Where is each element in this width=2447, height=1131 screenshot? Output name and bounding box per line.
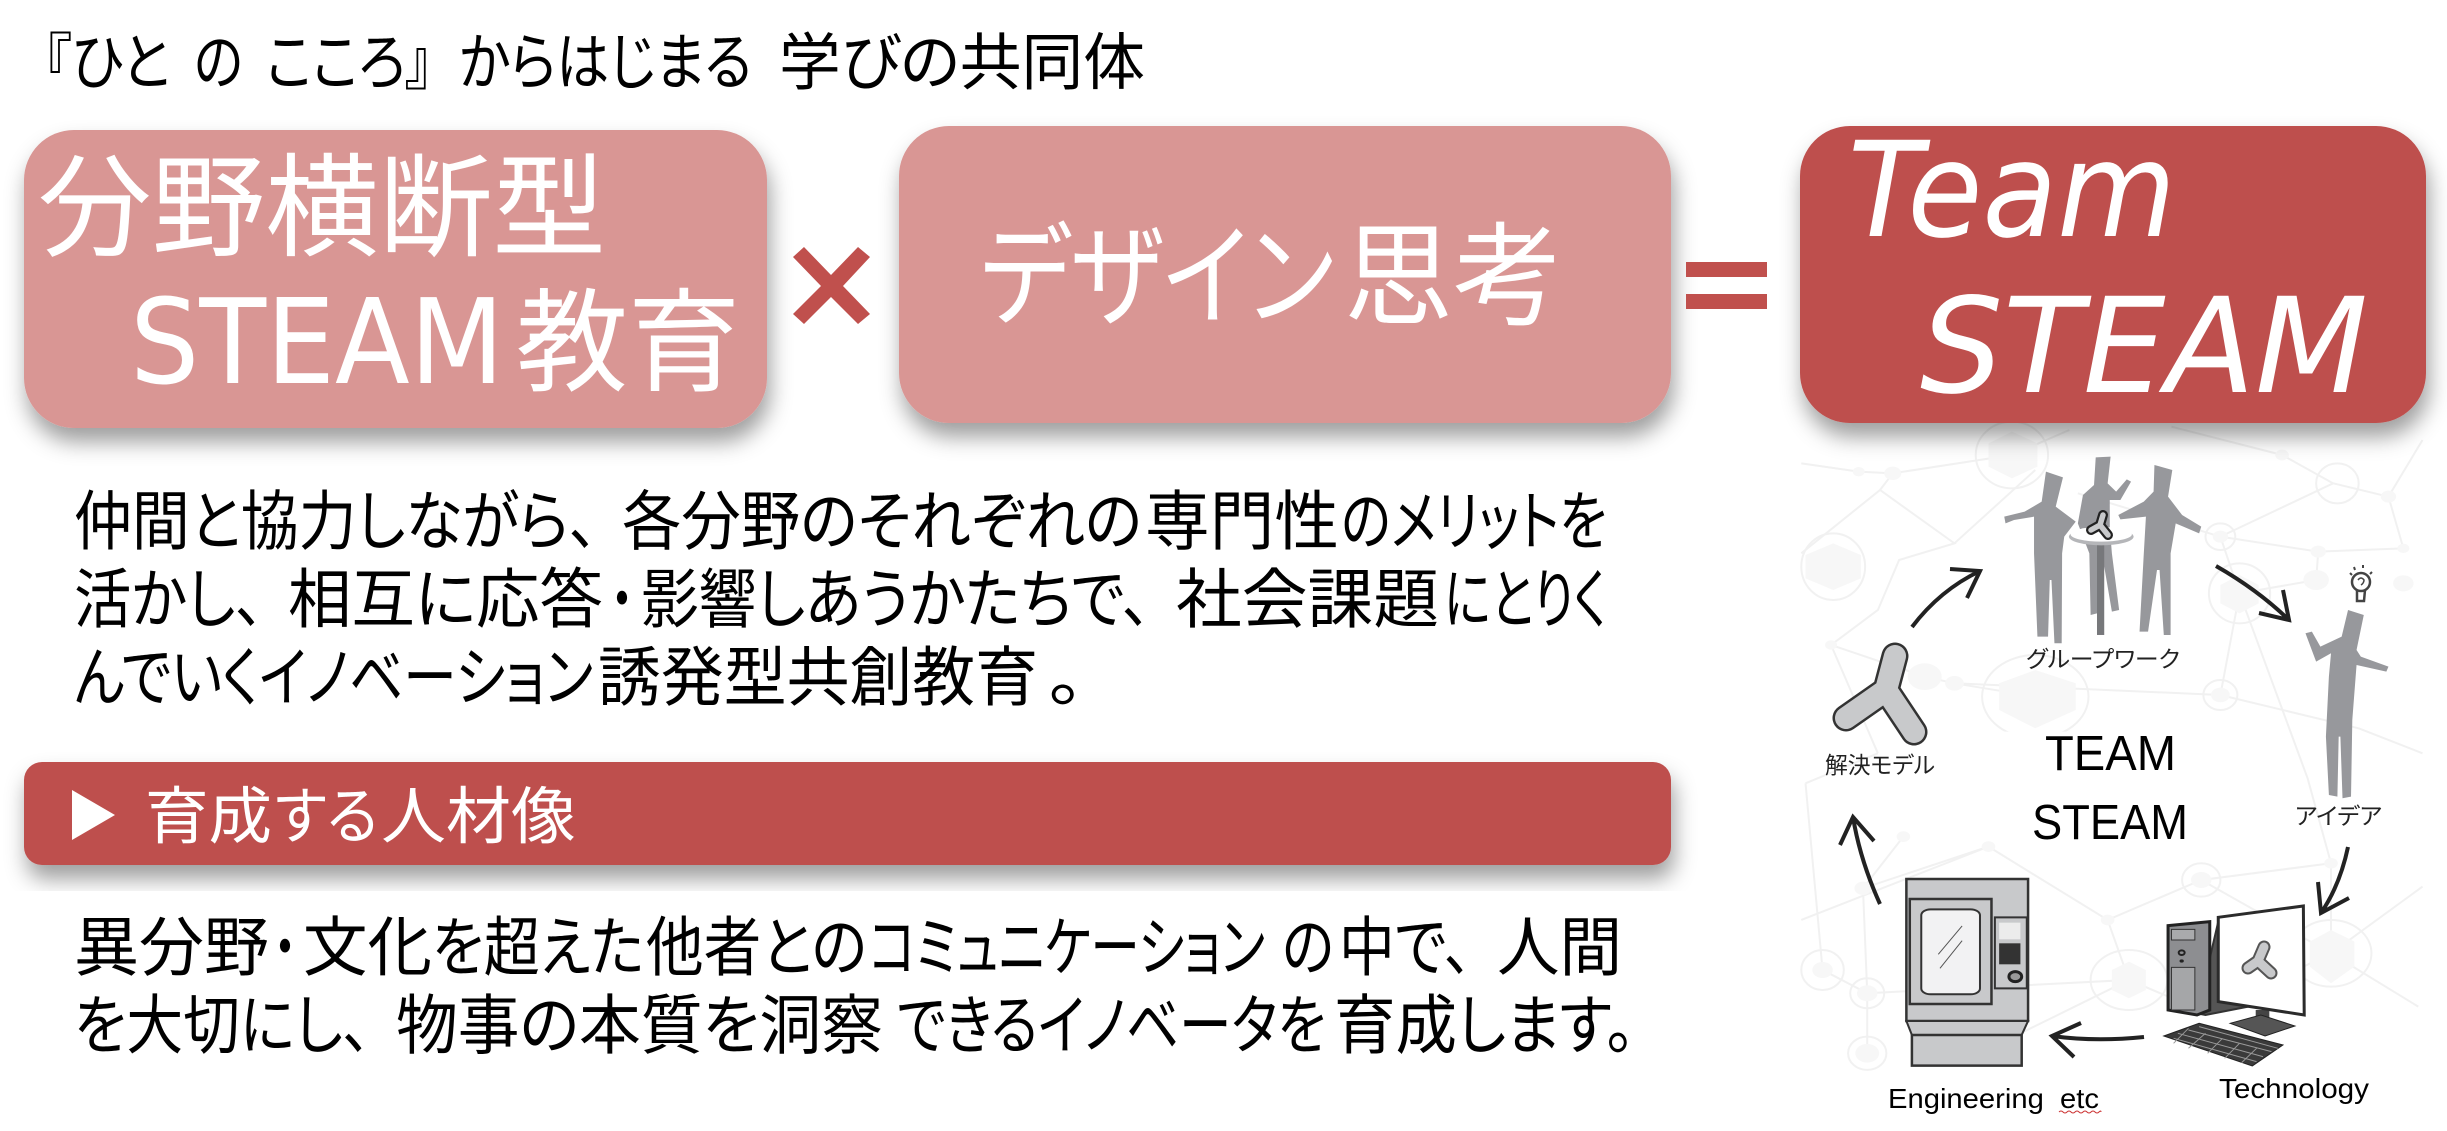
text: Team: Team bbox=[1848, 114, 2176, 268]
text block: target talent: 中で、 bbox=[1339, 911, 1472, 984]
text block: description: 専門性 bbox=[1145, 485, 1339, 558]
text block: target talent: の bbox=[1282, 911, 1334, 984]
text: 育成する人材像: 人材像 bbox=[381, 783, 576, 852]
text: STEAM: STEAM bbox=[130, 273, 504, 411]
text block: target talent: できるイノベータを bbox=[897, 989, 1326, 1062]
panel: network background bbox=[1801, 422, 2423, 1070]
text block: target talent bbox=[74, 911, 1635, 1062]
heading: TEAM STEAM bbox=[2032, 727, 2188, 850]
text: 育成する人材像: する bbox=[275, 783, 378, 852]
text block: description: 相互に応答 bbox=[288, 563, 603, 636]
text block: description: 仲間と協力しながら、 bbox=[74, 485, 598, 558]
text: デザイン思考: 思考 bbox=[1344, 215, 1562, 340]
text block: description: 社会課題 bbox=[1176, 563, 1439, 636]
text block: description: 各分野のそれぞれの bbox=[622, 485, 1142, 558]
text block: target talent: ・ bbox=[273, 911, 297, 984]
icon: small model on table bbox=[2091, 515, 2108, 535]
arrow: technology to engineering bbox=[2052, 1023, 2144, 1057]
text block: target talent: 物事の本質を洞察 bbox=[396, 989, 883, 1062]
arrow: group work to idea bbox=[2216, 566, 2289, 620]
icon: group work people bbox=[2004, 457, 2201, 643]
icon: model on monitor bbox=[2248, 947, 2271, 973]
title: からはじまる bbox=[459, 29, 752, 98]
label: アイデア: アイデア bbox=[2295, 803, 2382, 829]
title: 学びの共同体 bbox=[779, 29, 1145, 98]
text block: target talent: 他者との bbox=[646, 911, 867, 984]
icon: computer bbox=[2164, 906, 2304, 1066]
title: の bbox=[194, 29, 243, 98]
title: こころ』 bbox=[266, 29, 432, 98]
text: デザイン思考: デザイン bbox=[980, 215, 1334, 340]
icon: light bulb bbox=[2350, 565, 2372, 601]
arrow: engineering to model bbox=[1840, 817, 1880, 904]
text block: target talent: 文化 bbox=[303, 911, 432, 984]
text block: description: 。 bbox=[1048, 641, 1084, 714]
text block: description: 活かし、 bbox=[74, 563, 264, 636]
text block: target talent: 人間 bbox=[1497, 911, 1622, 984]
text: 分野横断型: 分野横断型 bbox=[38, 146, 606, 271]
text: STEAM: STEAM bbox=[1920, 270, 2368, 424]
icon: equals sign bbox=[1686, 262, 1767, 309]
heading: TEAM STEAM: STEAM bbox=[2032, 796, 2188, 850]
text: 育成する人材像: 育成 bbox=[145, 783, 272, 852]
title bbox=[44, 29, 1145, 98]
text block: description: にとりく bbox=[1444, 563, 1607, 636]
text block: target talent: 異分野 bbox=[74, 911, 269, 984]
panel: 分野横断型 STEAM教育 bbox=[24, 130, 767, 428]
icon: solution model bbox=[1846, 656, 1914, 732]
text: 育成する人材像 bbox=[145, 783, 576, 852]
text block: target talent: コミュニケーション bbox=[869, 911, 1265, 984]
text block: description: のメリットを bbox=[1341, 485, 1607, 558]
panel: デザイン思考 bbox=[899, 126, 1671, 423]
icon: multiply sign bbox=[793, 247, 870, 324]
icon: triangle bullet bbox=[72, 790, 115, 840]
label: グループワーク: グループワーク bbox=[2026, 646, 2180, 672]
text block: description bbox=[74, 485, 1607, 714]
text block: description: 誘発型共創教育 bbox=[598, 641, 1038, 714]
text block: target talent: します。 bbox=[1457, 989, 1635, 1062]
text block: description: ・ bbox=[610, 563, 634, 636]
panel: Team STEAM bbox=[1800, 114, 2426, 424]
label: Engineering etc: Engineering etc bbox=[1888, 1083, 2099, 1114]
label: 解決モデル: 解決モデル bbox=[1825, 752, 1935, 778]
text: 教育: 教育 bbox=[516, 281, 740, 406]
text block: target talent: を大切にし、 bbox=[74, 989, 371, 1062]
text block: description: 影響しあうかたちで、 bbox=[641, 563, 1151, 636]
text block: description: んでいくイノベーション bbox=[74, 641, 593, 714]
text block: target talent: 育成 bbox=[1334, 989, 1457, 1062]
text block: target talent: を超えた bbox=[432, 911, 644, 984]
arrow: idea to technology bbox=[2318, 847, 2349, 913]
label: Technology: Technology bbox=[2219, 1073, 2369, 1104]
panel: 育成する人材像 banner bbox=[24, 762, 1671, 865]
icon: idea person bbox=[2305, 610, 2388, 798]
title: 『ひと bbox=[44, 29, 170, 98]
arrow: model to group work bbox=[1912, 569, 1980, 627]
heading: TEAM STEAM: TEAM bbox=[2045, 727, 2176, 781]
icon: machine bbox=[1906, 879, 2028, 1066]
